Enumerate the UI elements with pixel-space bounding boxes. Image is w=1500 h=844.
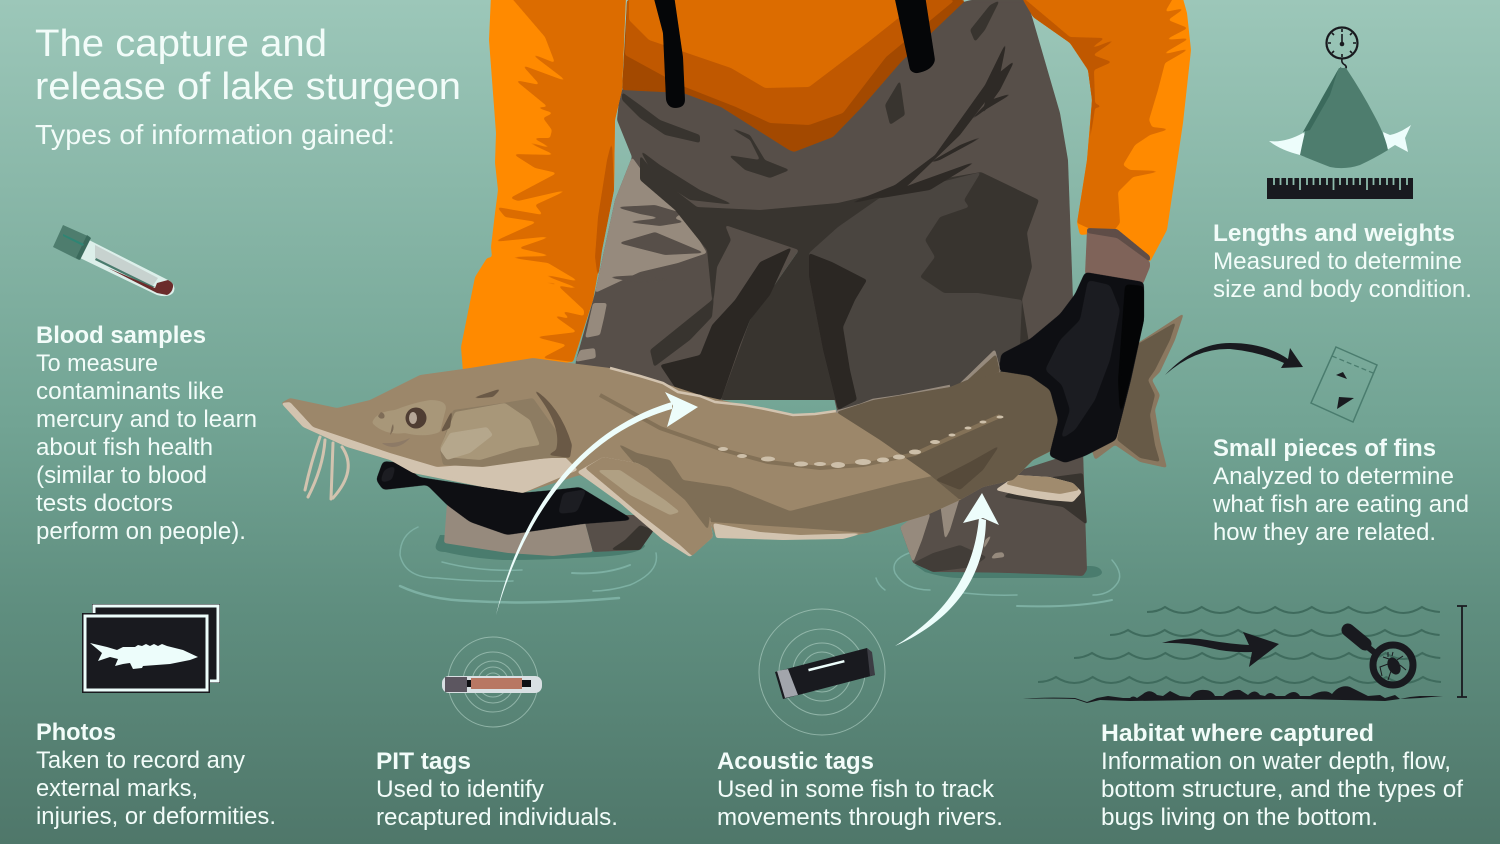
right glove	[999, 272, 1144, 463]
icon: habitat	[1023, 606, 1467, 703]
light wader patches	[575, 303, 607, 362]
text: blood samples: contaminants like	[36, 378, 224, 405]
text: lengths and weights: Measured to determine	[1213, 248, 1462, 275]
text: blood samples	[36, 322, 257, 545]
text: lengths and weights: Lengths and weights	[1213, 220, 1455, 247]
waves	[1038, 607, 1441, 683]
text: acoustic tags	[717, 748, 1003, 831]
straps	[653, 0, 685, 108]
right sleeve	[1023, 0, 1191, 262]
text: acoustic tags: movements through rivers.	[717, 804, 1003, 831]
text: small pieces of fins	[1212, 435, 1469, 546]
text: habitat: Habitat where captured	[1101, 720, 1374, 747]
text: PIT tags: PIT tags	[376, 748, 471, 775]
icon: acoustic tag	[759, 609, 885, 735]
text: blood samples: Blood samples	[36, 322, 206, 349]
icon: fin sample envelope	[1311, 347, 1377, 422]
magnifier and bug	[1348, 630, 1413, 685]
dark wader shading	[640, 155, 1039, 400]
text: photos: injuries, or deformities.	[36, 803, 276, 830]
sturgeon	[281, 313, 1184, 557]
waders upper	[570, 0, 1075, 420]
fish in bag	[1269, 133, 1310, 157]
text: PIT tags: recaptured individuals.	[376, 804, 618, 831]
text: habitat: bottom structure, and the types of	[1101, 776, 1463, 803]
ruler	[1267, 178, 1413, 199]
light wader panel	[595, 157, 707, 293]
heading	[35, 23, 461, 150]
anal fin	[995, 475, 1082, 502]
clock scale	[1326, 28, 1358, 69]
heading: The capture and	[35, 23, 327, 65]
river bed	[1023, 686, 1443, 703]
text: lengths and weights: size and body condition.	[1213, 276, 1472, 303]
text: blood samples: tests doctors	[36, 490, 173, 517]
text: photos: external marks,	[36, 775, 198, 802]
inner leg darkest	[660, 247, 867, 410]
text: small pieces of fins: Analyzed to determine	[1213, 463, 1454, 490]
icon: blood tube	[53, 225, 174, 296]
text: PIT tags	[376, 748, 618, 831]
arrow: to acoustic tag location	[895, 493, 999, 646]
text: acoustic tags: Acoustic tags	[717, 748, 874, 775]
text: photos	[36, 719, 276, 830]
back edge highlight	[610, 368, 836, 415]
text: PIT tags: Used to identify	[376, 776, 545, 803]
underbelly	[713, 523, 865, 540]
head plate	[372, 400, 446, 435]
wader fold lines	[845, 40, 1015, 205]
text: small pieces of fins: what fish are eating and	[1212, 491, 1469, 518]
text: blood samples: mercury and to learn	[36, 406, 257, 433]
scutes	[718, 416, 1004, 468]
icon: photos	[82, 604, 220, 693]
lower body stripe	[617, 443, 960, 533]
lateral line	[600, 395, 1000, 468]
text: photos: Taken to record any	[36, 747, 246, 774]
left sleeve	[461, 0, 626, 372]
water shadow under legs	[436, 535, 1102, 578]
icon: PIT tag	[442, 637, 542, 727]
right forearm	[1085, 230, 1150, 284]
right leg mid tone	[809, 172, 1022, 410]
text: acoustic tags: Used in some fish to track	[717, 776, 995, 803]
barbels	[305, 437, 348, 499]
nostrils and mouth	[378, 412, 394, 435]
dorsal fin	[955, 349, 1001, 388]
person in waders	[444, 0, 1191, 576]
icon: scale and ruler	[1267, 28, 1413, 199]
arrow: to PIT tag location	[496, 392, 698, 615]
text: blood samples: (similar to blood	[36, 462, 207, 489]
sleeve dark edge	[595, 140, 614, 280]
text: habitat	[1101, 720, 1463, 831]
eye	[406, 408, 426, 428]
right lower leg	[900, 450, 1087, 576]
left lower leg	[444, 503, 593, 556]
text: lengths and weights	[1213, 220, 1472, 303]
text: photos: Photos	[36, 719, 116, 746]
cheek shading	[440, 398, 570, 467]
belly	[281, 402, 578, 493]
tail fin	[1090, 313, 1184, 468]
body	[281, 358, 1062, 538]
text: habitat: Information on water depth, flow,	[1101, 748, 1451, 775]
left sleeve folds	[493, 0, 626, 362]
pectoral fin	[577, 457, 713, 557]
right sleeve folds	[1023, 0, 1191, 232]
depth scale bar	[1457, 606, 1467, 697]
text: blood samples: about fish health	[36, 434, 213, 461]
gill arc	[532, 388, 572, 458]
text: small pieces of fins: Small pieces of fins	[1213, 435, 1436, 462]
heading: Types of information gained:	[35, 119, 395, 150]
heading: release of lake sturgeon	[35, 66, 461, 108]
text: small pieces of fins: how they are related.	[1213, 519, 1436, 546]
text: habitat: bugs living on the bottom.	[1101, 804, 1378, 831]
text: blood samples: perform on people).	[36, 518, 246, 545]
left glove	[376, 461, 634, 535]
text: blood samples: To measure	[36, 350, 158, 377]
arrow: fin clip to envelope	[1165, 343, 1303, 375]
torso jacket	[622, 0, 966, 152]
water ripples	[400, 527, 1120, 606]
tail section shadow	[836, 372, 1062, 500]
flow arrow	[1162, 632, 1279, 667]
